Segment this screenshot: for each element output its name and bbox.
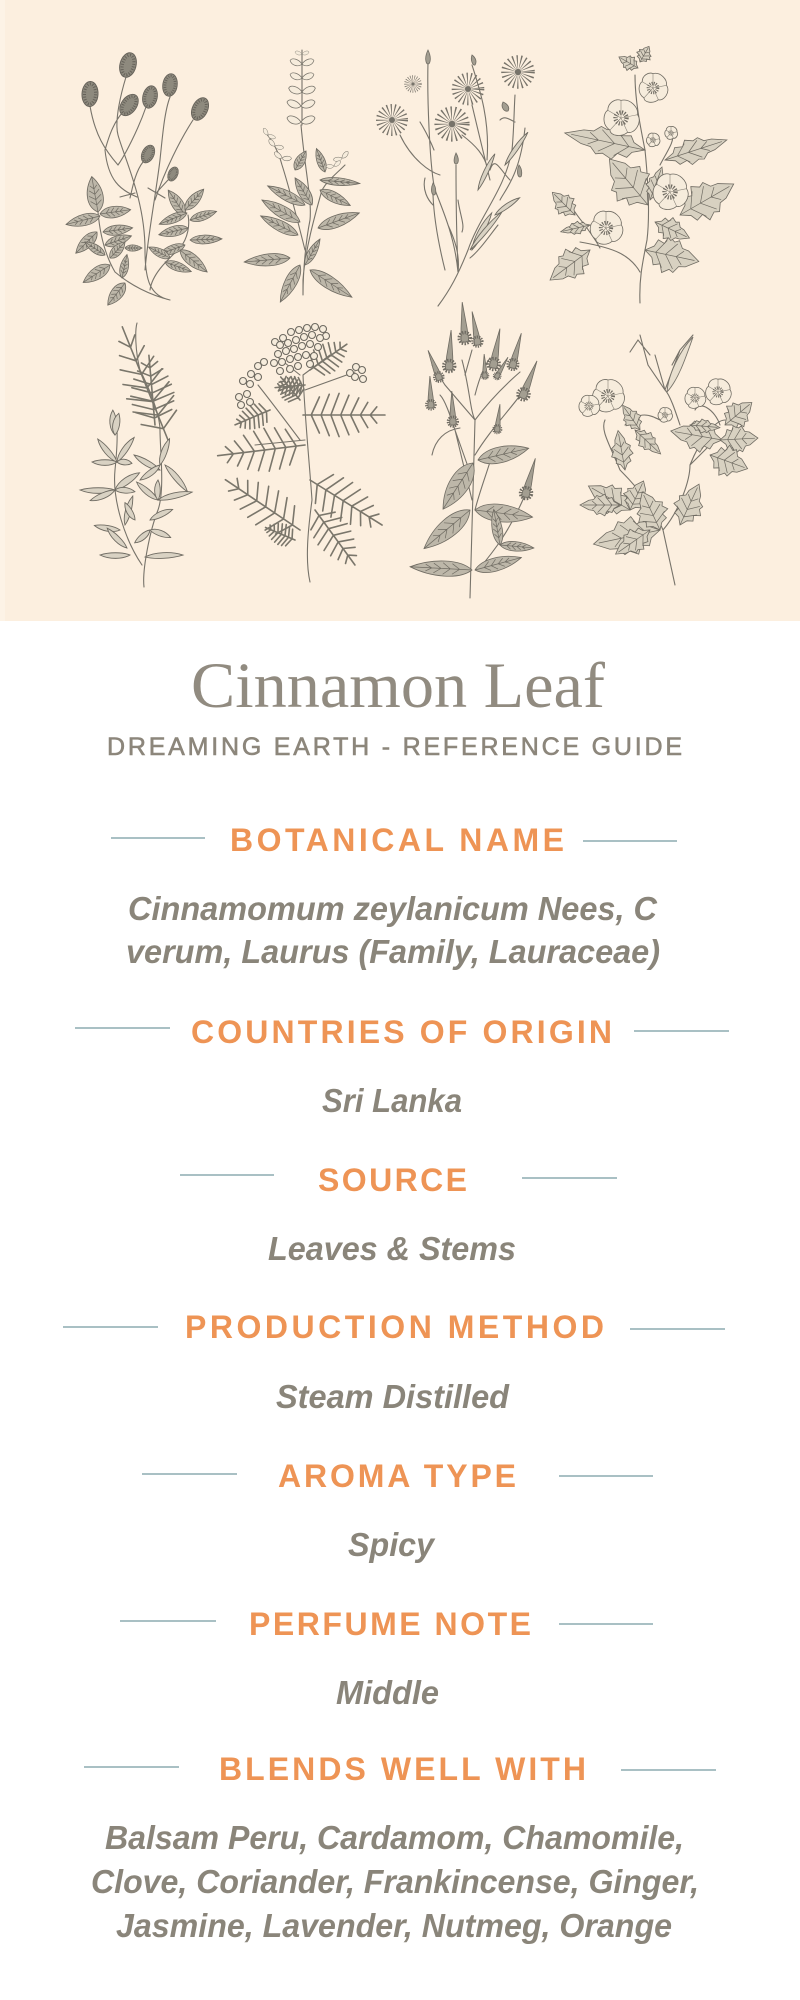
- subtitle: DREAMING EARTH - REFERENCE GUIDE: [107, 733, 682, 761]
- plant: verbena: [410, 302, 542, 598]
- section: production method: [63, 1309, 725, 1415]
- section: aroma type: Spicy: [348, 1526, 436, 1563]
- section: blends well with: Balsam Peru, Cardamom, Chamomile,: [105, 1819, 684, 1856]
- section: botanical name: [111, 822, 677, 970]
- plant: mallow: [541, 43, 743, 303]
- title: Cinnamon Leaf: [191, 650, 605, 722]
- section: source: [180, 1162, 617, 1267]
- plant: tansy with pinnate leaves: [214, 324, 393, 582]
- section: botanical name: Cinnamomum zeylanicum Nees, C: [128, 890, 658, 927]
- plant: celandine with lobed leaves: [579, 335, 760, 585]
- section: blends well with: [84, 1751, 716, 1944]
- section: blends well with: BLENDS WELL WITH: [219, 1751, 586, 1787]
- section: source: SOURCE: [318, 1162, 467, 1198]
- section: countries of origin: [75, 1014, 729, 1119]
- plant: bedstraw with narrow leaves: [80, 318, 193, 587]
- section: perfume note: PERFUME NOTE: [249, 1606, 531, 1642]
- section: perfume note: Middle: [336, 1674, 439, 1711]
- illustration panel: [0, 0, 800, 621]
- section: aroma type: [142, 1458, 653, 1563]
- section: production method: Steam Distilled: [276, 1378, 510, 1415]
- plant: sage with flower spike: [244, 50, 361, 305]
- section: production method: PRODUCTION METHOD: [185, 1309, 604, 1345]
- section: perfume note: [120, 1606, 653, 1711]
- section: botanical name: verum, Laurus (Family, Lauraceae): [126, 933, 660, 970]
- section: countries of origin: COUNTRIES OF ORIGIN: [191, 1014, 612, 1050]
- section: blends well with: Clove, Coriander, Frankincense, Ginger,: [91, 1863, 699, 1900]
- section: aroma type: AROMA TYPE: [278, 1458, 516, 1494]
- section: botanical name: BOTANICAL NAME: [230, 822, 564, 858]
- plant: burnet with seed heads: [65, 51, 222, 309]
- section: blends well with: Jasmine, Lavender, Nutmeg, Orange: [116, 1907, 672, 1944]
- section: source: Leaves & Stems: [268, 1230, 516, 1267]
- section: countries of origin: Sri Lanka: [322, 1082, 462, 1119]
- plant: cornflower: [382, 50, 529, 306]
